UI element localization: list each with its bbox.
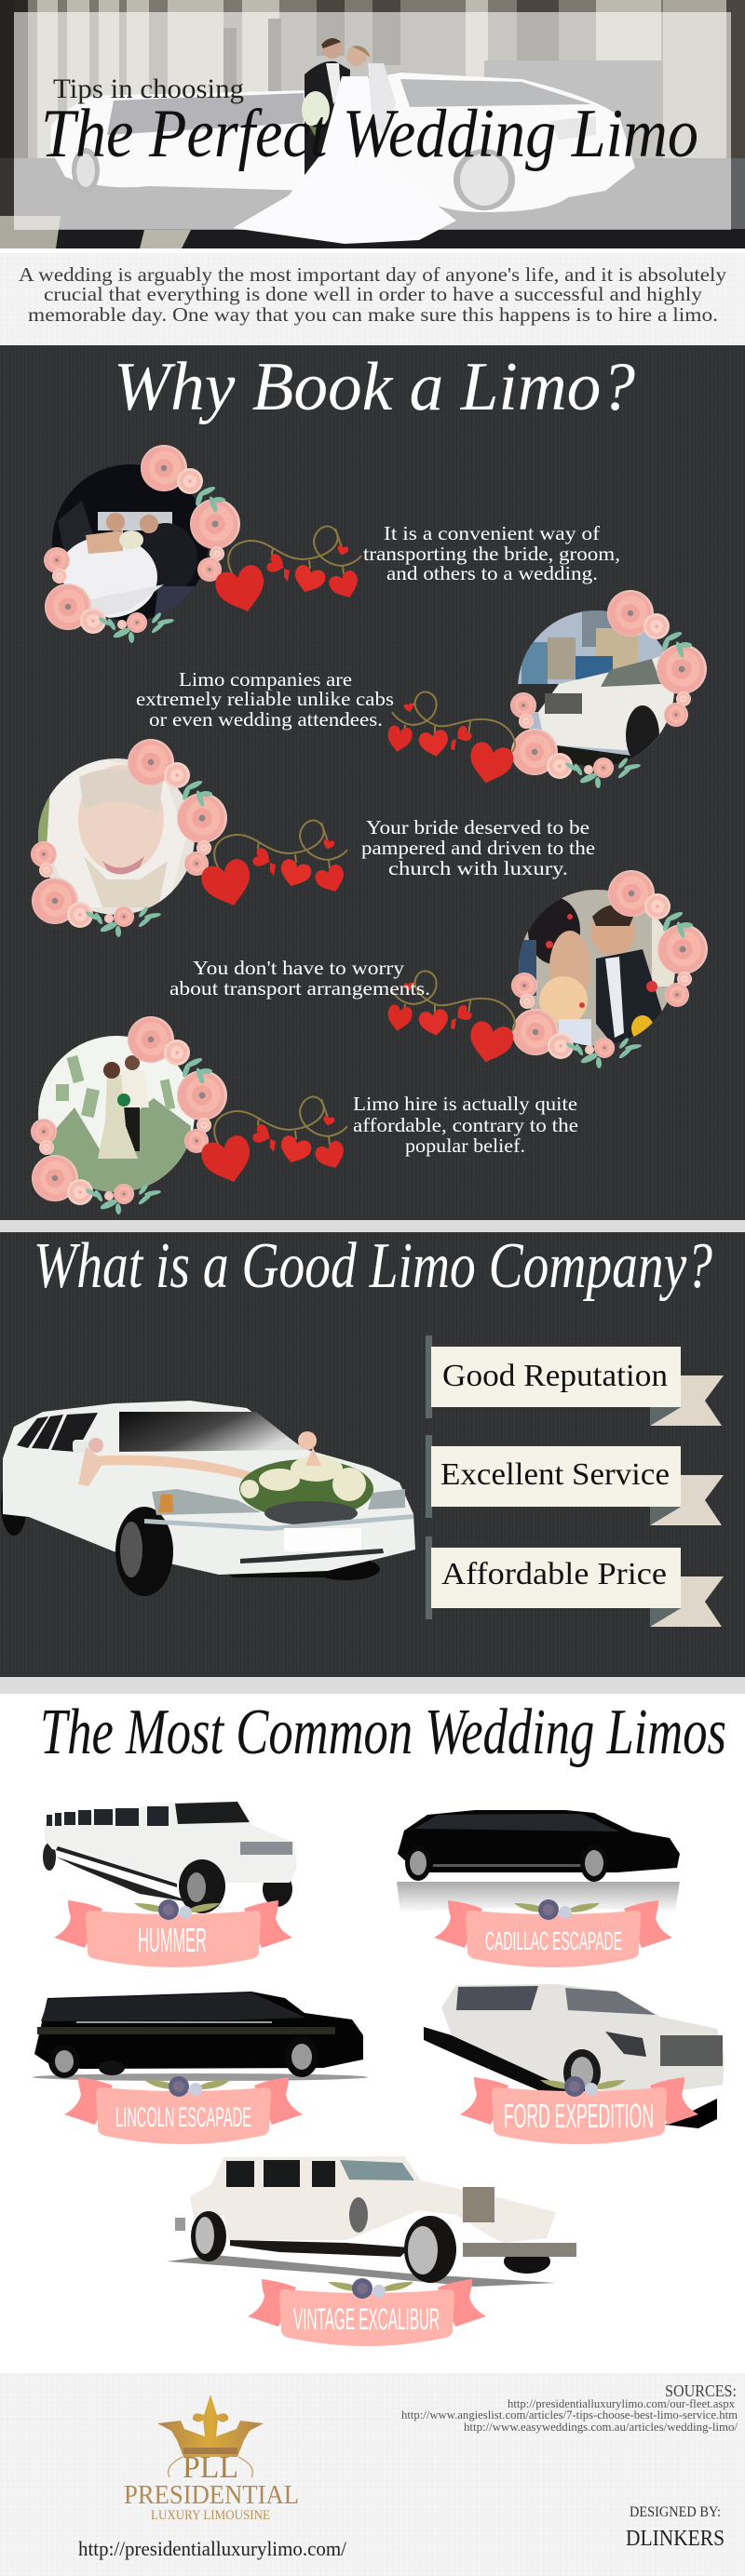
photo: smiling bride xyxy=(38,758,195,915)
banner: lincoln escapade: LINCOLN ESCAPADE xyxy=(115,2102,251,2133)
label: affordable price xyxy=(426,1536,724,1627)
text: reason 5: affordable, contrary to the xyxy=(353,1114,578,1136)
text: reason 3: church with luxury. xyxy=(388,857,568,879)
label: affordable price: Affordable Price xyxy=(441,1557,667,1591)
icon: vine with hearts 1 xyxy=(212,527,363,618)
icon: rose wreath 2 xyxy=(510,590,707,788)
text: reason 5: popular belief. xyxy=(405,1134,525,1157)
text: reason 2: or even wedding attendees. xyxy=(149,708,383,731)
panel: most common wedding limos xyxy=(0,1694,745,2373)
text: website url: http://presidentialluxurylimo.com/ xyxy=(78,2537,347,2560)
text block: introduction xyxy=(19,263,727,326)
image: hummer xyxy=(43,1801,297,1913)
text: sources: http://www.angieslist.com/articles/7-tips-choose-best-limo-service.htm xyxy=(401,2408,738,2422)
image: lincoln escapade xyxy=(33,1992,368,2081)
heading: Why Book a Limo? xyxy=(114,349,635,425)
text: reason 5 xyxy=(353,1093,578,1157)
text: reason 3 xyxy=(361,816,595,879)
icon: rose wreath 5 xyxy=(31,1016,227,1214)
logo: presidential luxury limousine: LUXURY LIMOUSINE xyxy=(151,2508,270,2523)
text: sources xyxy=(401,2381,738,2434)
text block: introduction: crucial that everything is done well in order to have a successful and highly xyxy=(44,283,703,305)
text: reason 2: extremely reliable unlike cabs xyxy=(136,688,394,710)
text: sources: http://www.easyweddings.com.au/articles/wedding-limo/ xyxy=(464,2420,738,2434)
icon: rose wreath 1 xyxy=(44,445,240,643)
icon: rose wreath 4 xyxy=(511,870,708,1068)
image: cadillac escapade xyxy=(397,1810,680,1912)
text: reason 4: You don't have to worry xyxy=(193,957,405,979)
banner: hummer xyxy=(54,1899,292,1967)
text block: introduction: memorable day. One way that you can make sure this happens is to hire a limo. xyxy=(28,303,718,326)
photo: wedding couple cutout xyxy=(233,38,456,244)
icon: vine with hearts 3 xyxy=(198,821,349,912)
banner: vintage excalibur xyxy=(248,2278,486,2346)
text: reason 1: transporting the bride, groom, xyxy=(363,543,620,565)
image: vintage excalibur xyxy=(167,2156,576,2287)
label: good reputation xyxy=(426,1335,724,1426)
text: reason 2 xyxy=(136,668,394,731)
panel: why book a limo xyxy=(0,345,745,1220)
icon: rose wreath 3 xyxy=(31,739,227,937)
label: good reputation: Good Reputation xyxy=(442,1359,668,1393)
photo: couple under confetti xyxy=(517,889,680,1047)
text: reason 3: pampered and driven to the xyxy=(361,837,595,859)
photo: white limo in city xyxy=(518,610,674,767)
label: excellent service: Excellent Service xyxy=(440,1457,670,1492)
text: reason 2: Limo companies are xyxy=(179,668,352,691)
panel: footer xyxy=(0,2373,745,2576)
text: reason 5: Limo hire is actually quite xyxy=(353,1093,577,1115)
logo: presidential luxury limousine xyxy=(124,2395,299,2523)
photo: cake topper with money xyxy=(38,1036,195,1192)
divider band xyxy=(0,1220,745,1232)
banner: lincoln escapade xyxy=(64,2076,303,2144)
panel: hero photo xyxy=(0,0,745,248)
text: reason 4: about transport arrangements. xyxy=(169,977,430,1000)
text: designed by: DESIGNED BY: xyxy=(630,2504,721,2520)
panel: translucent title overlay xyxy=(14,12,731,230)
icon: vine with hearts 4 xyxy=(386,971,516,1067)
divider band xyxy=(0,1677,745,1694)
text: sources: http://presidentialluxurylimo.com/our-fleet.aspx xyxy=(508,2396,735,2410)
text: tips in choosing: Tips in choosing xyxy=(53,74,244,104)
panel: intro strip xyxy=(0,248,745,345)
banner: vintage excalibur: VINTAGE EXCALIBUR xyxy=(293,2302,440,2336)
text: reason 3: Your bride deserved to be xyxy=(366,816,589,839)
text: sources: SOURCES: xyxy=(665,2381,737,2400)
logo: presidential luxury limousine: PLL xyxy=(183,2450,238,2485)
text: reason 1 xyxy=(363,522,620,584)
icon: vine with hearts 2 xyxy=(386,691,516,788)
banner: ford expedition xyxy=(460,2076,698,2144)
text: reason 1: It is a convenient way of xyxy=(384,522,600,544)
text block: introduction: A wedding is arguably the most important day of anyone's life, and it is absolutely xyxy=(19,263,727,286)
logo: presidential luxury limousine: PRESIDENTIAL xyxy=(124,2481,299,2510)
banner: hummer: HUMMER xyxy=(138,1921,207,1959)
photo: couple inside limo xyxy=(52,464,209,621)
text: designer name: DLINKERS xyxy=(626,2527,725,2551)
banner: cadillac escapade xyxy=(434,1899,672,1967)
image: white limo with flowers xyxy=(1,1401,415,1596)
panel: what is a good limo company xyxy=(0,1230,745,1677)
icon: vine with hearts 5 xyxy=(198,1097,349,1188)
text: reason 4 xyxy=(169,957,430,1000)
image: ford expedition xyxy=(424,1984,725,2128)
label: excellent service xyxy=(426,1435,724,1525)
text: reason 1: and others to a wedding. xyxy=(386,562,598,584)
